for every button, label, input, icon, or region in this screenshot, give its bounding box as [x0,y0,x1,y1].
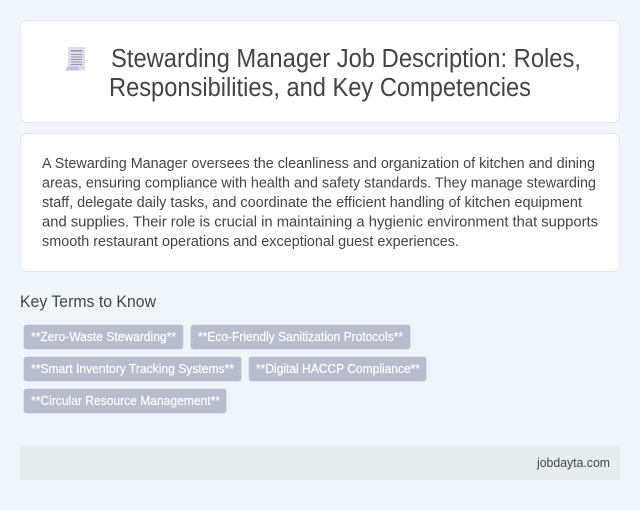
panel: title card [20,20,620,122]
description text: and supplies. Their role is crucial in maintaining a hygienic environment that supports [42,214,598,230]
tag: circular resource [24,388,226,414]
tag: eco-friendly sanitization [190,324,410,350]
description text: smooth restaurant operations and exceptional guest experiences. [42,233,459,250]
description text [42,155,598,250]
heading: Responsibilities, and Key Competencies [109,74,531,102]
footer bar: jobdayta.com [536,456,610,470]
panel: description [20,134,620,272]
tag: digital haccp: **Digital HACCP Compliance** [256,362,420,376]
tag: eco-friendly sanitization: **Eco-Friendly Sanitization Protocols** [198,330,403,344]
tag: zero-waste stewarding: **Zero-Waste Stewarding** [31,330,176,344]
tag: smart inventory [24,356,242,382]
heading: Stewarding Manager Job Description: Roles, [111,45,581,73]
tag: circular resource: **Circular Resource Management** [31,394,220,408]
tag: smart inventory: **Smart Inventory Tracking Systems** [31,362,234,376]
tag: zero-waste stewarding [24,324,184,350]
description text: areas, ensuring compliance with health and safety standards. They manage stewarding [42,174,596,192]
icon: document scroll [66,47,85,70]
description text: staff, delegate daily tasks, and coordinate the efficient handling of kitchen equipment [42,194,583,211]
heading: key terms: Key Terms to Know [20,293,156,311]
description text: A Stewarding Manager oversees the cleanliness and organization of kitchen and dining [42,155,595,172]
tag: digital haccp [248,356,426,382]
tags: key terms [24,324,426,414]
heading [109,45,581,102]
footer bar [20,446,620,480]
